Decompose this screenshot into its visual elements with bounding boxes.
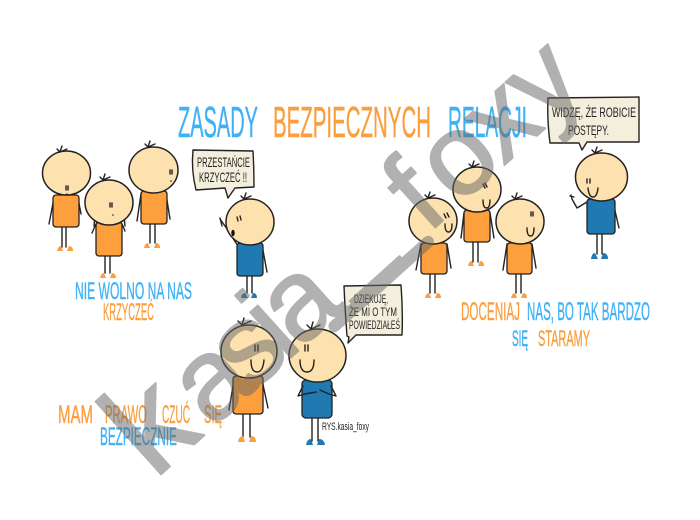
figure: orange person smiling right xyxy=(496,193,544,298)
text: SIĘ xyxy=(204,401,222,429)
caption: right to feel safe: PRAWO xyxy=(105,401,147,429)
speech bubble: I see your progress: POSTĘPY. xyxy=(568,122,609,138)
signature: RYS.kasia_foxy xyxy=(322,421,369,433)
speech bubble: stop shouting: KRZYCZEĆ !! xyxy=(199,169,247,185)
speech bubble: I see your progress: WIDZĘ, ŻE ROBICIE xyxy=(552,103,636,120)
speech bubble: stop shouting: PRZESTAŃCIE xyxy=(197,154,250,170)
text: RELACJI xyxy=(448,98,527,147)
caption: no shouting: KRZYCZEĆ xyxy=(103,299,154,326)
caption: no shouting: NIE WOLNO NA NAS xyxy=(75,278,192,305)
figure: orange person left xyxy=(42,146,90,251)
caption: no shouting xyxy=(75,278,192,326)
caption: appreciate us xyxy=(461,298,650,351)
caption: right to feel safe: BEZPIECZNIE xyxy=(100,423,177,451)
figure: orange person smiling left xyxy=(409,192,457,298)
title: ZASADY xyxy=(178,98,258,147)
speech bubble: thank you for telling me xyxy=(344,285,402,343)
caption: appreciate us: STARAMY xyxy=(538,326,590,351)
title xyxy=(178,98,527,147)
figure: orange person front xyxy=(85,174,133,278)
figure: blue person speaking xyxy=(220,193,274,298)
figure: orange person happy xyxy=(221,318,277,442)
speech bubble: I see your progress xyxy=(548,97,639,150)
watermark: kasia_foxy xyxy=(73,0,608,502)
figure: orange person right xyxy=(129,141,178,248)
caption: appreciate us: DOCENIAJ xyxy=(461,298,520,326)
speech bubble: thank you for telling me: ŻE MI O TYM xyxy=(349,305,397,319)
speech bubble: thank you for telling me: DZIĘKUJĘ, xyxy=(354,292,388,306)
figure: blue person pointing xyxy=(570,147,628,259)
caption: right to feel safe: CZUĆ xyxy=(162,400,190,429)
caption: right to feel safe xyxy=(58,400,222,451)
figure: blue person thankful xyxy=(289,322,346,445)
caption: right to feel safe: MAM xyxy=(58,401,93,429)
title: BEZPIECZNYCH xyxy=(273,98,431,147)
caption: appreciate us: SIĘ xyxy=(512,326,528,351)
speech bubble: stop shouting xyxy=(192,150,254,198)
speech bubble: thank you for telling me: POWIEDZIAŁEŚ xyxy=(349,317,400,332)
figure: orange person smiling back xyxy=(453,161,501,266)
